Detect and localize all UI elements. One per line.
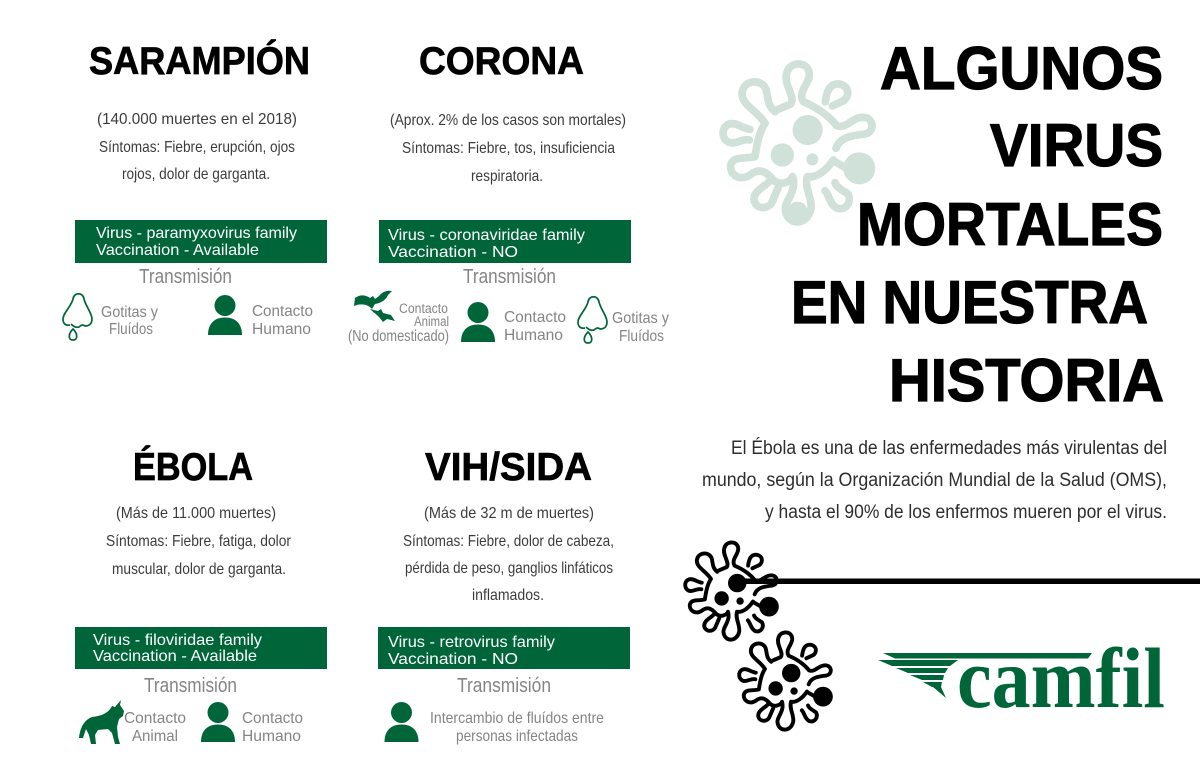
- panel: ébola: [75, 445, 327, 745]
- label: gotitas y fluidos: [101, 304, 158, 338]
- label: contacto animal: Animal: [132, 728, 178, 745]
- text: corona description: (Aprox. 2% de los casos son mortales): [390, 112, 626, 129]
- label: transmisión: Transmisión: [463, 266, 556, 288]
- heading: vih/sida: VIH/SIDA: [425, 446, 592, 489]
- label: intercambio de fluidos: Intercambio de fluídos entre: [430, 710, 604, 727]
- label: contacto animal: [124, 710, 186, 745]
- label: contacto humano: Contacto: [242, 710, 303, 727]
- info bar: vih: [378, 627, 630, 669]
- text: ébola description: [106, 505, 292, 578]
- label: gotitas y fluidos: Fluídos: [109, 321, 153, 338]
- icon: nose droplets: [578, 297, 607, 343]
- text: corona description: respiratoria.: [471, 168, 543, 185]
- text: sarampión description: (140.000 muertes en el 2018): [97, 111, 297, 128]
- label: transmisión: Transmisión: [457, 675, 551, 697]
- info bar: corona: Vaccination - NO: [388, 244, 518, 261]
- text: vih description: Síntomas: Fiebre, dolor de cabeza,: [403, 533, 614, 550]
- label: contacto humano: [242, 710, 303, 745]
- title: ALGUNOS: [880, 35, 1163, 102]
- text: vih description: pérdida de peso, ganglios linfáticos: [405, 560, 613, 577]
- title: VIRUS: [990, 112, 1163, 179]
- icon: person: [461, 302, 495, 342]
- text: sarampión description: Síntomas: Fiebre, erupción, ojos: [99, 139, 295, 156]
- panel: sarampión: [63, 39, 327, 340]
- icon: black virus top: [685, 542, 779, 640]
- label: contacto humano: Contacto: [504, 309, 566, 326]
- icon: bats: [354, 291, 395, 322]
- label: transmisión: Transmisión: [144, 675, 237, 697]
- label: contacto humano: Humano: [504, 327, 563, 344]
- text: corona description: Síntomas: Fiebre, tos, insuficiencia: [402, 140, 615, 157]
- title: HISTORIA: [889, 347, 1164, 414]
- text: ébola description: muscular, dolor de garganta.: [112, 561, 286, 578]
- label: contacto animal no domesticado: (No domesticado): [348, 328, 449, 345]
- panel: corona: [348, 40, 669, 345]
- heading: sarampión: SARAMPIÓN: [89, 39, 310, 83]
- label: gotitas y fluidos: Fluídos: [619, 328, 664, 345]
- heading: corona: CORONA: [419, 40, 584, 83]
- label: intercambio de fluidos: [430, 710, 604, 745]
- icon: black virus bottom: [739, 632, 833, 730]
- text: ebola paragraph: [702, 438, 1167, 523]
- text: sarampión description: rojos, dolor de garganta.: [122, 166, 270, 183]
- label: transmisión: Transmisión: [139, 266, 232, 288]
- heading: ébola: ÉBOLA: [133, 445, 253, 489]
- title: [791, 35, 1164, 414]
- label: contacto humano: Humano: [252, 321, 311, 338]
- label: gotitas y fluidos: [612, 310, 669, 345]
- label: contacto animal no domesticado: [348, 301, 449, 345]
- info bar: vih: Vaccination - NO: [388, 651, 518, 668]
- info bar: vih: Virus - retrovirus family: [388, 634, 555, 651]
- icon: nose droplets: [63, 294, 92, 340]
- icon: pale virus: [723, 64, 875, 222]
- text: ebola paragraph: El Ébola es una de las enfermedades más virulentas del: [731, 438, 1167, 459]
- info bar: sarampión: [75, 220, 327, 263]
- icon: person: [201, 702, 235, 742]
- text: vih description: (Más de 32 m de muertes): [424, 505, 594, 522]
- label: contacto humano: Contacto: [252, 303, 313, 320]
- info bar: corona: [379, 220, 631, 263]
- info bar: ébola: Virus - filoviridae family: [93, 632, 262, 649]
- icon: person: [208, 295, 242, 335]
- text: ébola description: Síntomas: Fiebre, fatiga, dolor: [106, 533, 292, 550]
- label: contacto humano: [504, 309, 566, 344]
- label: gotitas y fluidos: Gotitas y: [101, 304, 158, 321]
- panel: vih/sida: [378, 446, 630, 745]
- logo: camfil: [878, 630, 1165, 726]
- label: contacto animal: Contacto: [124, 710, 186, 727]
- info bar: ébola: [75, 627, 327, 669]
- text: ébola description: (Más de 11.000 muertes): [116, 505, 276, 522]
- label: contacto humano: [252, 303, 313, 338]
- text: vih description: inflamados.: [472, 587, 544, 604]
- label: contacto humano: Humano: [242, 728, 301, 745]
- info bar: corona: Virus - coronaviridae family: [388, 227, 585, 244]
- text: ebola paragraph: mundo, según la Organización Mundial de la Salud (OMS),: [702, 470, 1167, 491]
- info bar: sarampión: Virus - paramyxovirus family: [96, 225, 297, 242]
- info bar: ébola: Vaccination - Available: [93, 648, 257, 665]
- text: ebola paragraph: y hasta el 90% de los enfermos mueren por el virus.: [765, 502, 1167, 523]
- info bar: sarampión: Vaccination - Available: [96, 242, 259, 259]
- text: vih description: [403, 505, 614, 604]
- logo: camfil: camfil: [957, 630, 1165, 726]
- title: MORTALES: [857, 191, 1163, 258]
- icon: wolf: [79, 700, 124, 744]
- text: corona description: [390, 112, 626, 185]
- title: EN NUESTRA: [791, 269, 1148, 336]
- label: contacto animal no domesticado: Contacto: [399, 301, 448, 316]
- icon: person: [384, 702, 418, 742]
- label: gotitas y fluidos: Gotitas y: [612, 310, 669, 327]
- label: intercambio de fluidos: personas infectadas: [456, 728, 578, 745]
- label: contacto animal no domesticado: Animal: [414, 314, 449, 329]
- divider line: [742, 578, 1200, 584]
- text: sarampión description: [97, 111, 297, 183]
